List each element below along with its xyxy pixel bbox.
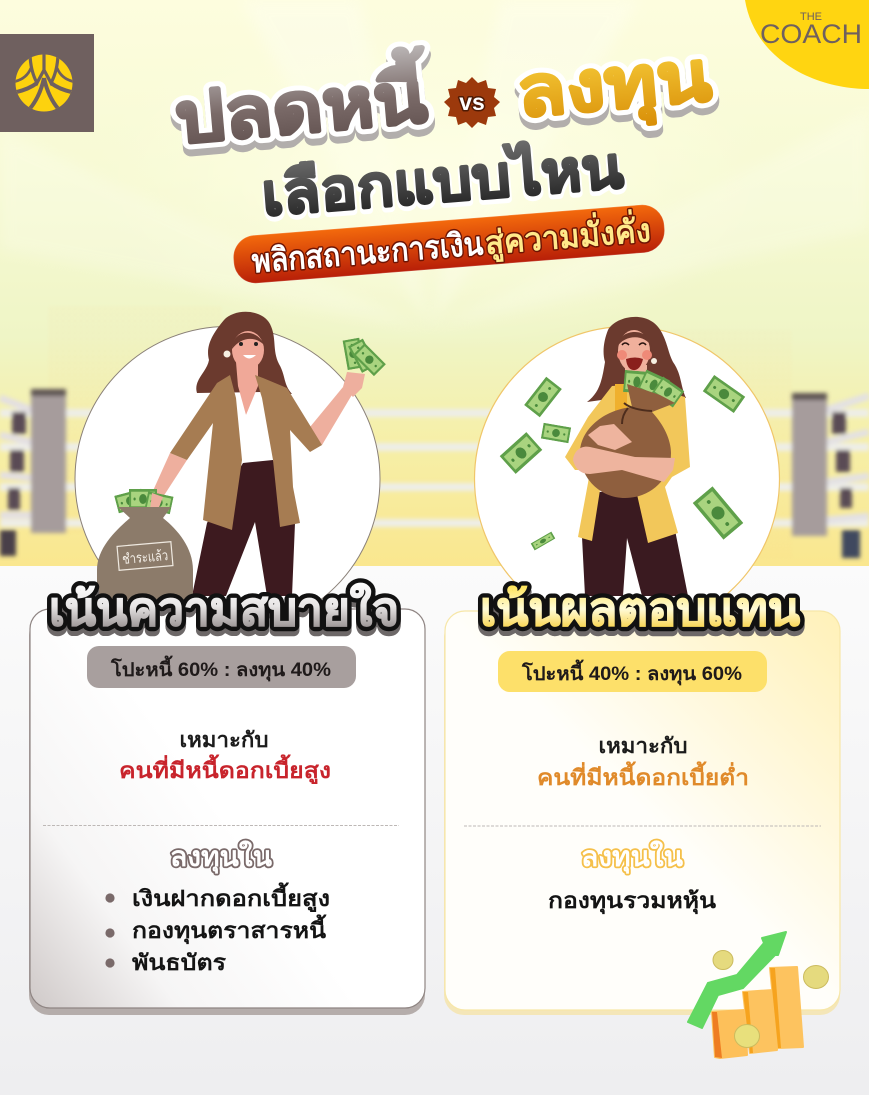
- pill: left allocation: โปะหนี้ 60% : ลงทุน 40%: [110, 655, 331, 682]
- logo: THE COACH corner: THE: [800, 11, 822, 23]
- icon: growth chart with arrow and coins: [688, 932, 828, 1058]
- title: debt payoff: ปลดหนี้: [171, 45, 431, 158]
- heading: focus on peace of mind: เน้นความสบายใจ: [49, 587, 399, 640]
- illustration: woman holding cash with paid-off bag: [97, 312, 386, 600]
- subtitle ribbon: พลิกสถานะการเงิน: [250, 225, 485, 279]
- heading: invest in (right): ลงทุนใน: [581, 840, 683, 874]
- logo: bank badge: [0, 34, 94, 132]
- text: suited for high interest: เหมาะกับ: [180, 729, 268, 752]
- panel: left illustration circle: [75, 326, 380, 632]
- title: invest: ลงทุน: [514, 37, 715, 136]
- text: suited for low interest: [537, 735, 749, 790]
- title: which way: เลือกแบบไหน: [259, 134, 626, 228]
- text: suited for low interest: เหมาะกับ: [598, 735, 688, 758]
- floor: [0, 566, 869, 1095]
- panel: right illustration circle: [474, 326, 780, 632]
- title: invest: ลงทุน: [514, 37, 715, 136]
- list: left investments: เงินฝากดอกเบี้ยสูง: [132, 882, 330, 913]
- text: suited for high interest: คนที่มีหนี้ดอกเบี้ยสูง: [119, 754, 331, 785]
- logo: THE COACH corner: [745, 0, 869, 89]
- illustration: woman hugging money bag with flying cash: [500, 317, 745, 596]
- logo: THE COACH corner: COACH: [760, 19, 862, 49]
- text: suited for low interest: คนที่มีหนี้ดอกเบี้ยต่ำ: [537, 761, 749, 790]
- pill: left allocation: [87, 646, 356, 688]
- title: invest: ลงทุน: [514, 44, 715, 143]
- background: [0, 0, 869, 580]
- heading: focus on peace of mind: เน้นความสบายใจ: [49, 582, 399, 635]
- heading: invest in (left): ลงทุนใน: [170, 840, 272, 874]
- text: equity fund: กองทุนรวมหหุ้น: [548, 888, 716, 915]
- pill: right allocation: โปะหนี้ 40% : ลงทุน 60%: [521, 659, 742, 686]
- heading: focus on returns: เน้นผลตอบแทน: [480, 588, 801, 640]
- heading: focus on peace of mind: เน้นความสบายใจ: [49, 582, 399, 635]
- vs badge: [444, 77, 500, 128]
- subtitle ribbon: [232, 203, 666, 285]
- list: left investments: กองทุนตราสารหนี้: [132, 914, 327, 945]
- title: debt payoff: ปลดหนี้: [171, 45, 431, 158]
- illustration: woman holding cash with paid-off bag: ชำระแล้ว: [121, 547, 169, 567]
- panel: right card: [444, 611, 840, 1015]
- panel: left card: [29, 609, 425, 1015]
- pill: right allocation: [498, 651, 767, 692]
- list: left investments: [105, 882, 330, 975]
- list: left investments: พันธบัตร: [132, 950, 226, 975]
- title: debt payoff: ปลดหนี้: [171, 52, 432, 165]
- heading: focus on returns: เน้นผลตอบแทน: [480, 583, 801, 635]
- boxing ring: [0, 389, 869, 558]
- text: suited for high interest: [119, 729, 331, 785]
- vs badge: vs: [459, 89, 485, 115]
- subtitle ribbon: สู่ความมั่งคั่ง: [483, 207, 652, 264]
- title: which way: เลือกแบบไหน: [260, 137, 626, 231]
- heading: focus on returns: เน้นผลตอบแทน: [480, 583, 801, 635]
